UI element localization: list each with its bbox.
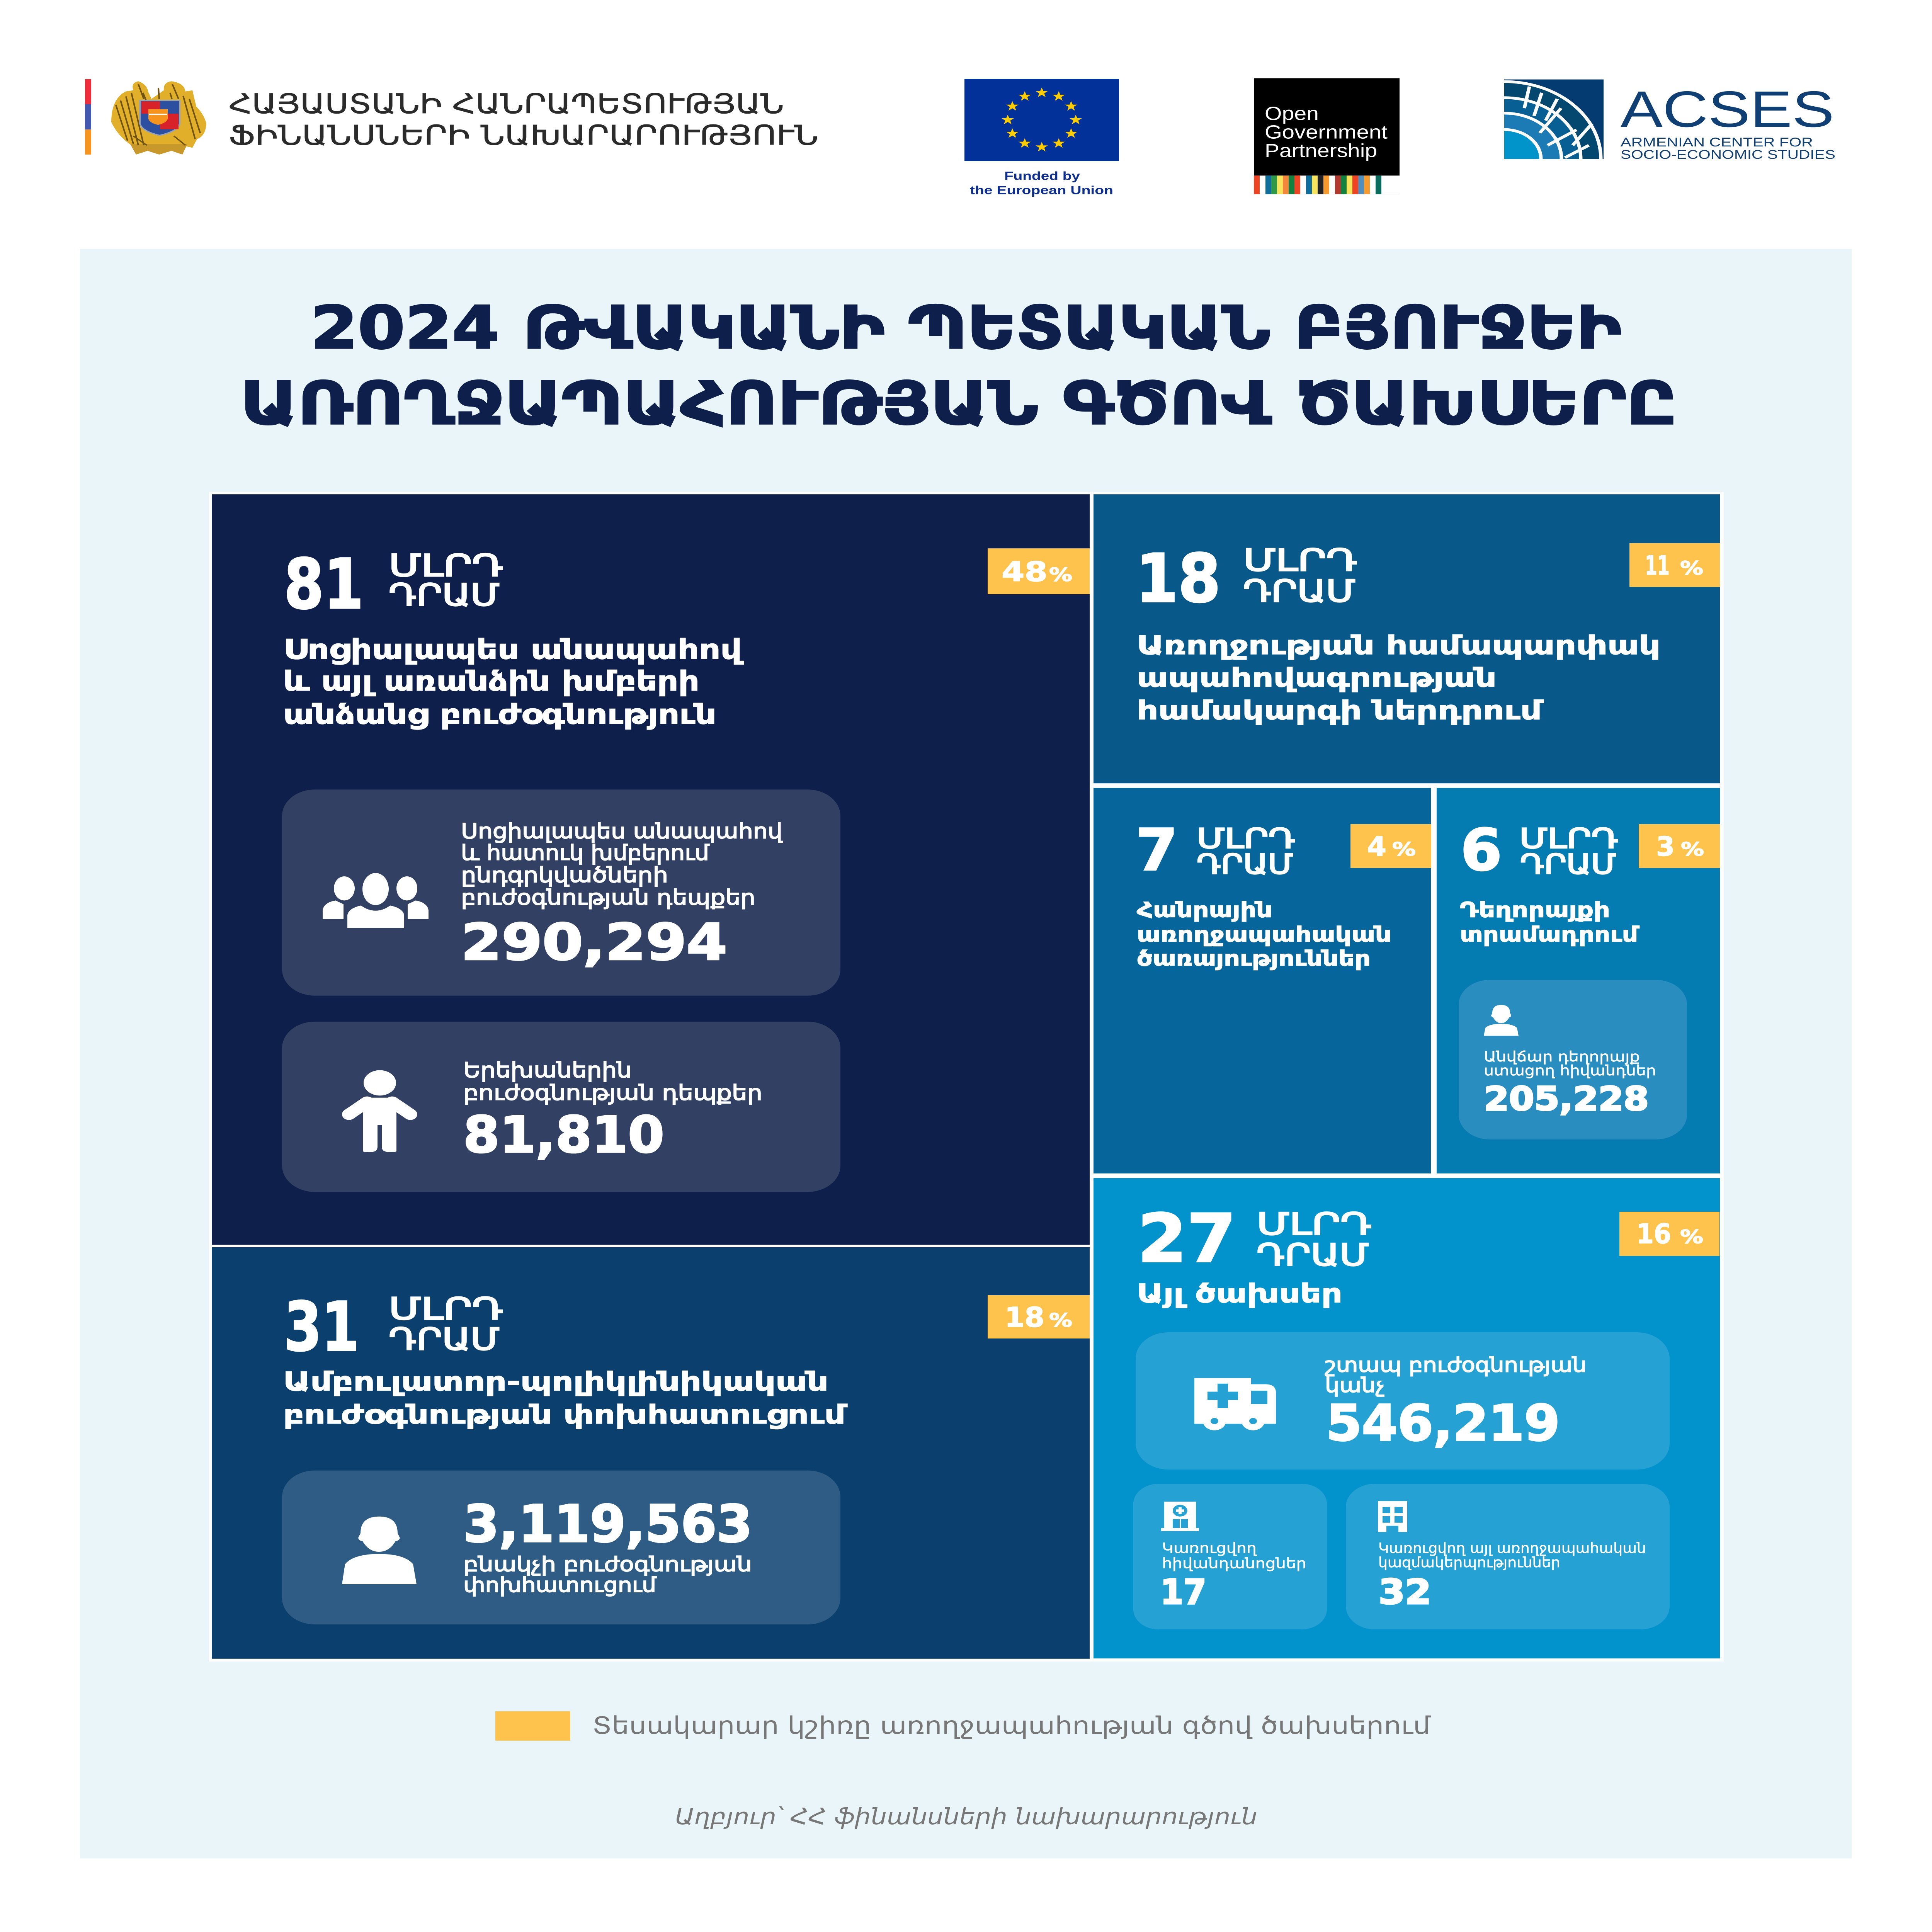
card: cases among vulnerable groups bbox=[282, 789, 840, 996]
logo: EU flag, Funded by the European Union: Funded by bbox=[1004, 170, 1080, 183]
amount: 18 billion dram: ԴՐԱՄ bbox=[1243, 573, 1355, 609]
amount: 81 billion dram: 81 bbox=[284, 544, 364, 624]
amount: 31 billion dram bbox=[284, 1288, 503, 1366]
logo: EU flag, Funded by the European Union bbox=[964, 79, 1119, 197]
heading bbox=[1137, 898, 1391, 971]
heading: ապահովագրության bbox=[1137, 662, 1497, 693]
amount: 81 billion dram: ԴՐԱՄ bbox=[389, 578, 500, 613]
heading: համակարգի ներդրում bbox=[1137, 695, 1544, 726]
heading: բուժօգնության փոխհատուցում bbox=[283, 1399, 848, 1430]
icon: child bbox=[349, 1070, 410, 1152]
badge: 48%: % bbox=[1049, 564, 1072, 585]
badge: 4%: % bbox=[1392, 838, 1416, 860]
card: reimbursed residents bbox=[282, 1471, 840, 1624]
badge: 16% bbox=[1619, 1212, 1719, 1256]
logo: ACSES: SOCIO-ECONOMIC STUDIES bbox=[1621, 148, 1835, 162]
main panel background bbox=[80, 249, 1852, 1859]
badge: 4%: 4 bbox=[1367, 832, 1386, 862]
amount: 7 billion dram bbox=[1136, 817, 1295, 884]
amount: 27 billion dram bbox=[1138, 1200, 1372, 1277]
card: other facilities under construction: 32 bbox=[1379, 1573, 1431, 1612]
badge: 48% bbox=[988, 548, 1090, 594]
legend: Տեսակարար կշիռը առողջապահության գծով ծախսերում bbox=[592, 1711, 1431, 1740]
ministry name bbox=[229, 88, 818, 151]
panel: 81 billion, vulnerable groups bbox=[212, 494, 1090, 1245]
heading: անձանց բուժօգնություն bbox=[283, 698, 716, 730]
amount: 31 billion dram: 31 bbox=[284, 1288, 359, 1366]
card: hospitals under construction: հիվանդանոցներ bbox=[1162, 1555, 1306, 1571]
amount: 81 billion dram: ՄԼՐԴ bbox=[389, 548, 503, 583]
icon: three people bbox=[323, 872, 429, 929]
heading bbox=[1460, 898, 1640, 947]
amount: 27 billion dram: ԴՐԱՄ bbox=[1257, 1238, 1369, 1273]
heading: Սոցիալապես անապահով bbox=[283, 633, 744, 665]
card: cases among vulnerable groups: 290,294 bbox=[461, 913, 727, 971]
heading: առողջապահական bbox=[1137, 922, 1391, 947]
card: hospitals under construction bbox=[1133, 1484, 1327, 1629]
card: children's cases: Երեխաներին bbox=[463, 1058, 632, 1082]
panel: 18 billion, health insurance bbox=[1094, 494, 1720, 783]
amount: 18 billion dram: 18 bbox=[1136, 540, 1221, 617]
badge: 11%: 11 bbox=[1645, 550, 1670, 581]
badge: 48%: 48 bbox=[1002, 556, 1048, 588]
badge: 18% bbox=[988, 1295, 1090, 1338]
badge: 3%: % bbox=[1681, 838, 1704, 860]
badge: 3% bbox=[1639, 824, 1720, 868]
logo: Open Government Partnership: Government bbox=[1265, 121, 1388, 143]
badge: 11%: % bbox=[1680, 558, 1703, 579]
card: patients receiving free medicine: Անվճար դեղորայք bbox=[1484, 1048, 1640, 1065]
logo: ACSES: ARMENIAN CENTER FOR bbox=[1621, 135, 1813, 149]
heading bbox=[1137, 630, 1660, 726]
card: other facilities under construction: Կառուցվող այլ առողջապահական bbox=[1378, 1540, 1646, 1556]
amount: 6 billion dram bbox=[1461, 817, 1618, 884]
heading: ծառայություններ bbox=[1137, 946, 1371, 971]
icon: ambulance bbox=[1194, 1378, 1276, 1430]
logo: ACSES: ACSES bbox=[1621, 81, 1834, 138]
heading: տրամադրում bbox=[1460, 922, 1640, 947]
heading bbox=[283, 1366, 848, 1430]
card: other facilities under construction bbox=[1346, 1484, 1670, 1629]
card: ambulance calls: շտապ բուժօգնության bbox=[1325, 1354, 1587, 1377]
amount: 27 billion dram: 27 bbox=[1138, 1200, 1236, 1277]
title: ԱՌՈՂՋԱՊԱՀՈՒԹՅԱՆ ԳԾՈՎ ԾԱԽՍԵՐԸ bbox=[240, 369, 1677, 438]
badge: 4% bbox=[1350, 824, 1431, 868]
panel: 27 billion, other expenses bbox=[1094, 1178, 1720, 1658]
heading: և այլ առանձին խմբերի bbox=[283, 665, 699, 697]
card: cases among vulnerable groups: ընդգրկվածների bbox=[461, 863, 668, 887]
logo: Open Government Partnership bbox=[1254, 78, 1400, 194]
logo: Open Government Partnership: Open bbox=[1265, 102, 1319, 124]
card: cases among vulnerable groups: բուժօգնության դեպքեր bbox=[461, 885, 755, 910]
amount: 18 billion dram bbox=[1136, 540, 1357, 617]
logo: Open Government Partnership: Partnership bbox=[1265, 139, 1377, 161]
card: patients receiving free medicine: 205,228 bbox=[1484, 1080, 1649, 1118]
amount: 31 billion dram: ՄԼՐԴ bbox=[389, 1291, 503, 1327]
ministry name: ՀԱՅԱՍՏԱՆԻ ՀԱՆՐԱՊԵՏՈՒԹՅԱՆ bbox=[229, 88, 784, 120]
logo: ACSES bbox=[1504, 80, 1835, 162]
heading: Հանրային bbox=[1137, 898, 1272, 922]
card: other facilities under construction: կազմակերպություններ bbox=[1378, 1554, 1560, 1571]
card: ambulance calls: կանչ bbox=[1325, 1374, 1385, 1397]
card: ambulance calls bbox=[1136, 1332, 1670, 1469]
title bbox=[240, 293, 1677, 438]
badge: 16%: % bbox=[1680, 1226, 1703, 1248]
header: Ministry of Finance logo bbox=[85, 79, 818, 155]
card: reimbursed residents: բնակչի բուժօգնության bbox=[463, 1553, 752, 1577]
icon: coat of arms bbox=[111, 81, 206, 155]
amount: 6 billion dram: 6 bbox=[1461, 817, 1502, 884]
heading: Ամբուլատոր-պոլիկլինիկական bbox=[283, 1366, 828, 1396]
amount: 7 billion dram: ԴՐԱՄ bbox=[1197, 848, 1293, 880]
card: children's cases: 81,810 bbox=[463, 1105, 664, 1164]
card: reimbursed residents: 3,119,563 bbox=[463, 1495, 752, 1554]
amount: 6 billion dram: ՄԼՐԴ bbox=[1519, 823, 1618, 854]
heading: Առողջության համապարփակ bbox=[1137, 630, 1660, 660]
icon: person bbox=[342, 1517, 417, 1584]
icon: ACSES arches bbox=[1504, 80, 1604, 159]
logo: EU flag, Funded by the European Union: the European Union bbox=[970, 184, 1113, 197]
panel: 31 billion, ambulatory care bbox=[212, 1247, 1090, 1659]
card: patients receiving free medicine: ստացող հիվանդներ bbox=[1484, 1062, 1656, 1079]
badge: 18%: 18 bbox=[1005, 1301, 1044, 1333]
amount: 7 billion dram: ՄԼՐԴ bbox=[1197, 823, 1295, 854]
card: children's cases bbox=[282, 1022, 840, 1192]
title: 2024 ԹՎԱԿԱՆԻ ՊԵՏԱԿԱՆ ԲՅՈՒՋԵԻ bbox=[311, 293, 1621, 362]
panel: 7 billion, public health bbox=[1094, 788, 1431, 1173]
icon: building bbox=[1378, 1501, 1407, 1532]
source note: Աղբյուր՝ ՀՀ ֆինանսների նախարարություն bbox=[675, 1804, 1257, 1830]
card: ambulance calls: 546,219 bbox=[1326, 1395, 1560, 1452]
amount: 31 billion dram: ԴՐԱՄ bbox=[389, 1321, 500, 1357]
heading bbox=[283, 633, 744, 730]
amount: 27 billion dram: ՄԼՐԴ bbox=[1257, 1207, 1372, 1242]
badge: 16%: 16 bbox=[1636, 1218, 1671, 1250]
amount: 7 billion dram: 7 bbox=[1136, 817, 1178, 884]
card: cases among vulnerable groups: և հատուկ խմբերում bbox=[461, 840, 709, 865]
icon: person bbox=[1484, 1005, 1519, 1036]
card: patients receiving free medicine bbox=[1459, 980, 1687, 1139]
card: hospitals under construction: 17 bbox=[1160, 1573, 1206, 1612]
amount: 6 billion dram: ԴՐԱՄ bbox=[1520, 848, 1616, 880]
badge: 3%: 3 bbox=[1656, 832, 1675, 862]
panel: 6 billion, medicine supply bbox=[1437, 788, 1720, 1173]
card: hospitals under construction: Կառուցվող bbox=[1162, 1540, 1257, 1556]
icon: hospital bbox=[1161, 1502, 1199, 1531]
heading: Այլ ծախսեր bbox=[1137, 1278, 1342, 1308]
amount: 81 billion dram bbox=[284, 544, 503, 624]
flag bar bbox=[85, 79, 91, 155]
amount: 18 billion dram: ՄԼՐԴ bbox=[1243, 543, 1357, 578]
card: children's cases: բուժօգնության դեպքեր bbox=[463, 1080, 762, 1105]
badge: 18%: % bbox=[1049, 1310, 1072, 1331]
badge: 11% bbox=[1629, 543, 1720, 587]
heading: Դեղորայքի bbox=[1460, 898, 1610, 922]
ministry name: ՖԻՆԱՆՍՆԵՐԻ ՆԱԽԱՐԱՐՈՒԹՅՈՒՆ bbox=[229, 119, 818, 151]
card: cases among vulnerable groups: Սոցիալապես անապահով bbox=[461, 819, 783, 844]
card: reimbursed residents: փոխհատուցում bbox=[463, 1573, 656, 1597]
